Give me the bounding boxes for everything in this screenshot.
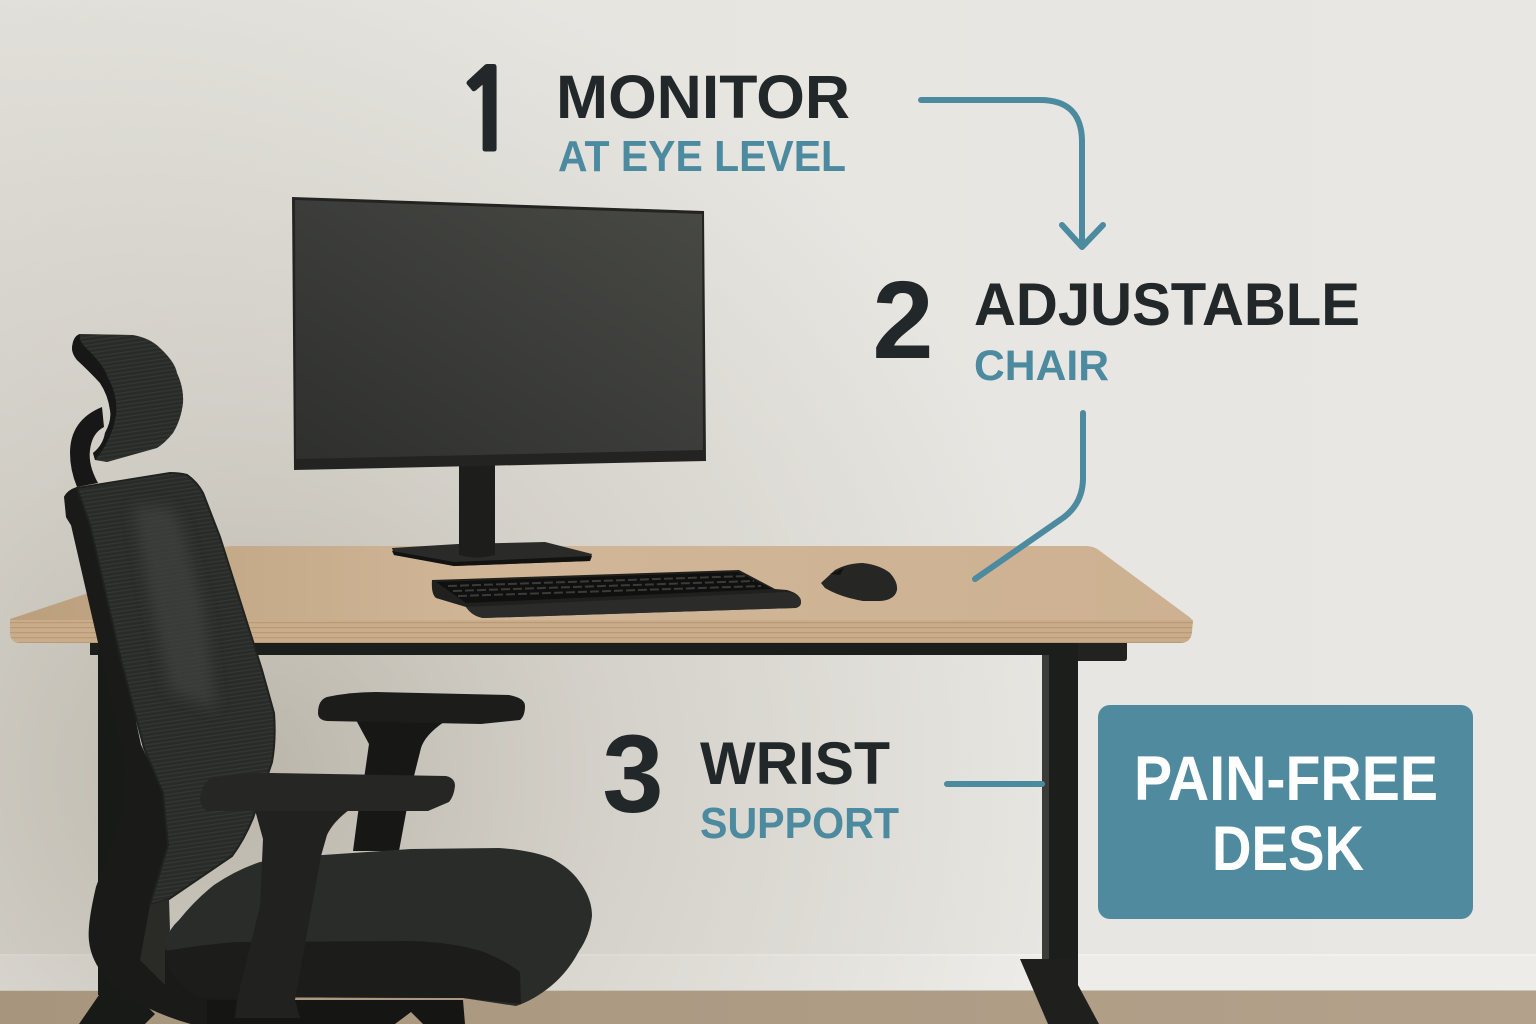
number 1: 1 <box>453 56 521 167</box>
callout: pain-free desk <box>1098 705 1473 919</box>
sublabel chair: CHAIR <box>974 342 1109 390</box>
far armrest <box>318 692 525 851</box>
desk front edge <box>10 620 1193 643</box>
label wrist: WRIST <box>700 730 890 797</box>
chair backrest <box>77 473 275 905</box>
monitor stand <box>392 462 592 566</box>
step 1: monitor at eye level <box>453 56 850 181</box>
sublabel at eye level: AT EYE LEVEL <box>558 132 846 181</box>
mouse <box>821 563 897 601</box>
chair seat <box>165 848 592 1006</box>
connector: chair to desk <box>975 413 1083 579</box>
chair frame <box>65 488 260 1024</box>
monitor screen <box>295 200 703 459</box>
desk top <box>10 546 1193 624</box>
arrow: monitor to chair <box>921 100 1103 247</box>
sublabel support: SUPPORT <box>700 799 899 848</box>
step 2: adjustable chair <box>872 259 1360 390</box>
chair headrest <box>70 334 183 487</box>
near armrest <box>200 773 455 1018</box>
keyboard <box>432 570 801 618</box>
connector: wrist support to desk leg <box>947 781 1042 787</box>
desk <box>10 546 1193 1024</box>
monitor <box>292 197 706 566</box>
desk legs and rail <box>79 640 1127 1024</box>
label monitor: MONITOR <box>556 63 850 131</box>
callout: pain-free desk: PAIN-FREE <box>1134 744 1438 814</box>
step 3: wrist support <box>602 713 899 848</box>
backrest light mesh panel <box>133 506 216 710</box>
number 3: 3 <box>602 713 664 836</box>
number 2: 2 <box>872 259 934 382</box>
chair <box>65 334 592 1024</box>
callout: pain-free desk: DESK <box>1212 814 1364 884</box>
chair lower back panel <box>140 899 170 985</box>
chair base mechanism <box>207 1000 465 1024</box>
label adjustable: ADJUSTABLE <box>974 271 1360 338</box>
monitor body <box>292 197 706 470</box>
